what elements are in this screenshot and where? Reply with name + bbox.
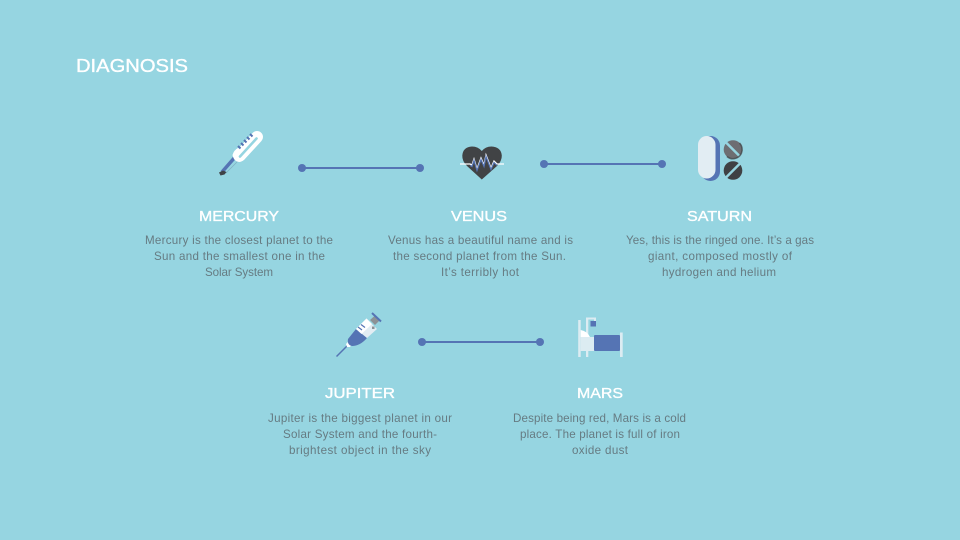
text block: saturn: giant, composed mostly of	[648, 250, 793, 263]
text block: mars: oxide dust	[572, 444, 629, 457]
connector: mercury to venus	[298, 164, 424, 172]
text block: saturn: hydrogen and helium	[662, 266, 776, 279]
icon: hospital bed	[578, 318, 623, 357]
heading: venus: VENUS	[451, 208, 507, 225]
panel: venus	[388, 208, 573, 279]
icon: heart with pulse	[460, 146, 504, 180]
text block: mars: place. The planet is full of iron	[520, 428, 680, 441]
text block: saturn: Yes, this is the ringed one. It’s a gas	[626, 234, 814, 247]
text block: jupiter: Solar System and the fourth-	[283, 428, 437, 441]
text block: venus	[388, 234, 573, 279]
text block: mars: Despite being red, Mars is a cold	[513, 412, 686, 425]
heading: saturn: SATURN	[687, 208, 752, 225]
panel: jupiter	[268, 385, 452, 457]
title: DIAGNOSIS	[76, 56, 188, 76]
icon: thermometer	[219, 134, 257, 176]
panel: mercury	[145, 208, 333, 279]
text block: jupiter: Jupiter is the biggest planet in our	[268, 412, 452, 425]
text block: jupiter: brightest object in the sky	[289, 444, 431, 457]
text block: venus: the second planet from the Sun.	[393, 250, 566, 263]
panel: saturn	[626, 208, 814, 279]
heading: mercury: MERCURY	[199, 208, 279, 225]
text block: mercury: Sun and the smallest one in the	[154, 250, 325, 263]
text block: venus: Venus has a beautiful name and is	[388, 234, 573, 247]
text block: mars	[513, 412, 686, 457]
connector: jupiter to mars	[418, 338, 544, 346]
text block: saturn	[626, 234, 814, 279]
panel: mars	[513, 385, 686, 457]
text block: mercury: Solar System	[205, 266, 273, 279]
heading: mars: MARS	[577, 385, 623, 402]
text block: venus: It’s terribly hot	[441, 266, 520, 279]
icon: syringe	[336, 313, 381, 356]
heading: jupiter: JUPITER	[325, 385, 395, 402]
icon: pills	[698, 136, 742, 181]
text block: jupiter	[268, 412, 452, 457]
connector: venus to saturn	[540, 160, 666, 168]
text block: mercury: Mercury is the closest planet to the	[145, 234, 333, 247]
text block: mercury	[145, 234, 333, 279]
